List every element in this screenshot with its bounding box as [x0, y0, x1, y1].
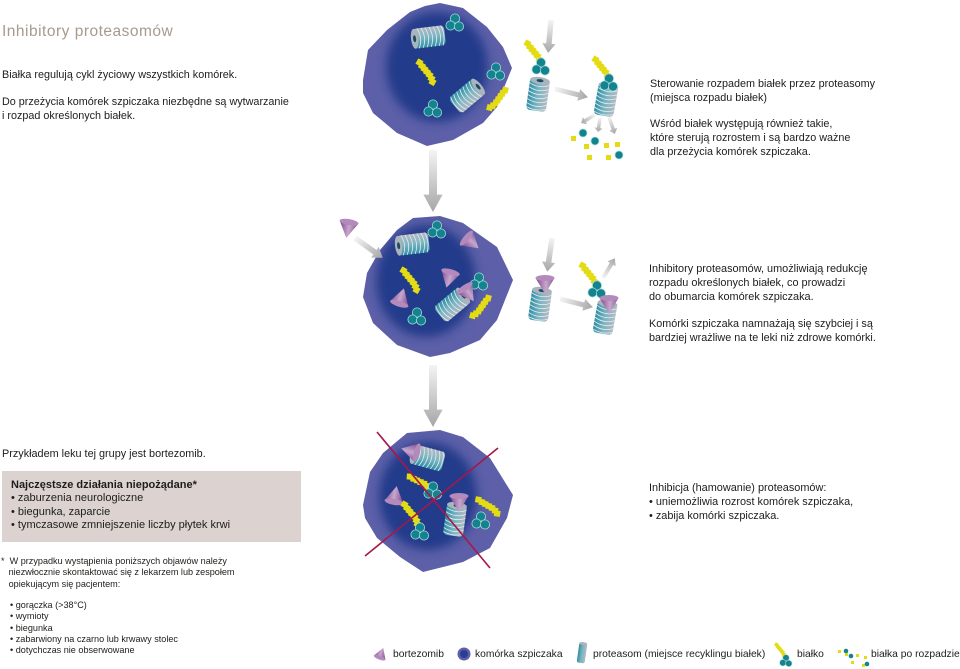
diagram: protein degradation in proteasome	[523, 19, 623, 160]
text: sensitivity: Komórki szpiczaka namnażają się szybciej i są bardziej wrażliwe na te leki niż zdrowe komórki.	[649, 318, 876, 344]
panel: common side effects	[2, 471, 301, 542]
legend label: proteasome: proteasom (miejsce recyklingu białek)	[593, 649, 765, 660]
cell: crossed out dying myeloma cell	[363, 430, 513, 572]
legend label: degraded protein: białka po rozpadzie	[871, 649, 960, 660]
cell: healthy proteasome activity	[363, 3, 514, 146]
intro text: Białka regulują cykl życiowy wszystkich komórek. Do przeżycia komórek szpiczaka niezbędne są wytwarzanie i rozpad określonych białek.	[2, 69, 289, 122]
icon: bortezomib entering cell	[337, 217, 387, 263]
legend icon: bortezomib	[373, 646, 389, 662]
footnote: symptom list: • gorączka (>38°C) • wymioty • biegunka • zabarwiony na czarno lub krwawy stolec • dotychczas nie obserwowane	[10, 600, 178, 655]
text: inhibition results: Inhibicja (hamowanie) proteasomów: • uniemożliwia rozrost komórek szpiczaka, • zabija komórki szpiczaka.	[649, 482, 853, 522]
legend label: protein: białko	[797, 649, 824, 660]
list: side effects: • zaburzenia neurologiczne • biegunka, zaparcie • tymczasowe zmniejszenie liczby płytek krwi	[11, 492, 230, 531]
title: Inhibitory proteasomów	[2, 23, 173, 40]
text: growth proteins: Wśród białek występują również takie, które sterują rozrostem i są bardzo ważne dla przeżycia komórek szpiczaka.	[650, 118, 850, 158]
diagram: blocked proteasomes	[528, 237, 619, 335]
text: proteasome control: Sterowanie rozpadem białek przez proteasomy (miejsca rozpadu białek)	[650, 78, 875, 104]
legend label: bortezomib: bortezomib	[393, 649, 444, 660]
cell: bortezomib entering and blocking proteasomes	[363, 216, 513, 357]
legend icon: myeloma cell	[458, 648, 470, 660]
legend icon: protein	[774, 642, 792, 667]
footnote: warning: * W przypadku wystąpienia poniższych objawów należy niezwłocznie skontaktować się z lekarzem lub zespołem opiekującym się pacjentem:	[1, 556, 235, 589]
text: inhibitors effect: Inhibitory proteasomów, umożliwiają redukcję rozpadu określonych białek, co prowadzi do obumarcia komórek szpiczaka.	[649, 263, 868, 303]
legend icon: proteasome	[577, 642, 587, 663]
heading: side effects: Najczęstsze działania niepożądane*	[11, 479, 197, 491]
arrow: down to third cell	[423, 365, 443, 427]
arrow: down to second cell	[423, 150, 443, 212]
text: bortezomib example: Przykładem leku tej grupy jest bortezomib.	[2, 448, 206, 460]
legend label: myeloma cell: komórka szpiczaka	[475, 649, 563, 660]
legend icon: protein after degradation	[838, 649, 869, 667]
